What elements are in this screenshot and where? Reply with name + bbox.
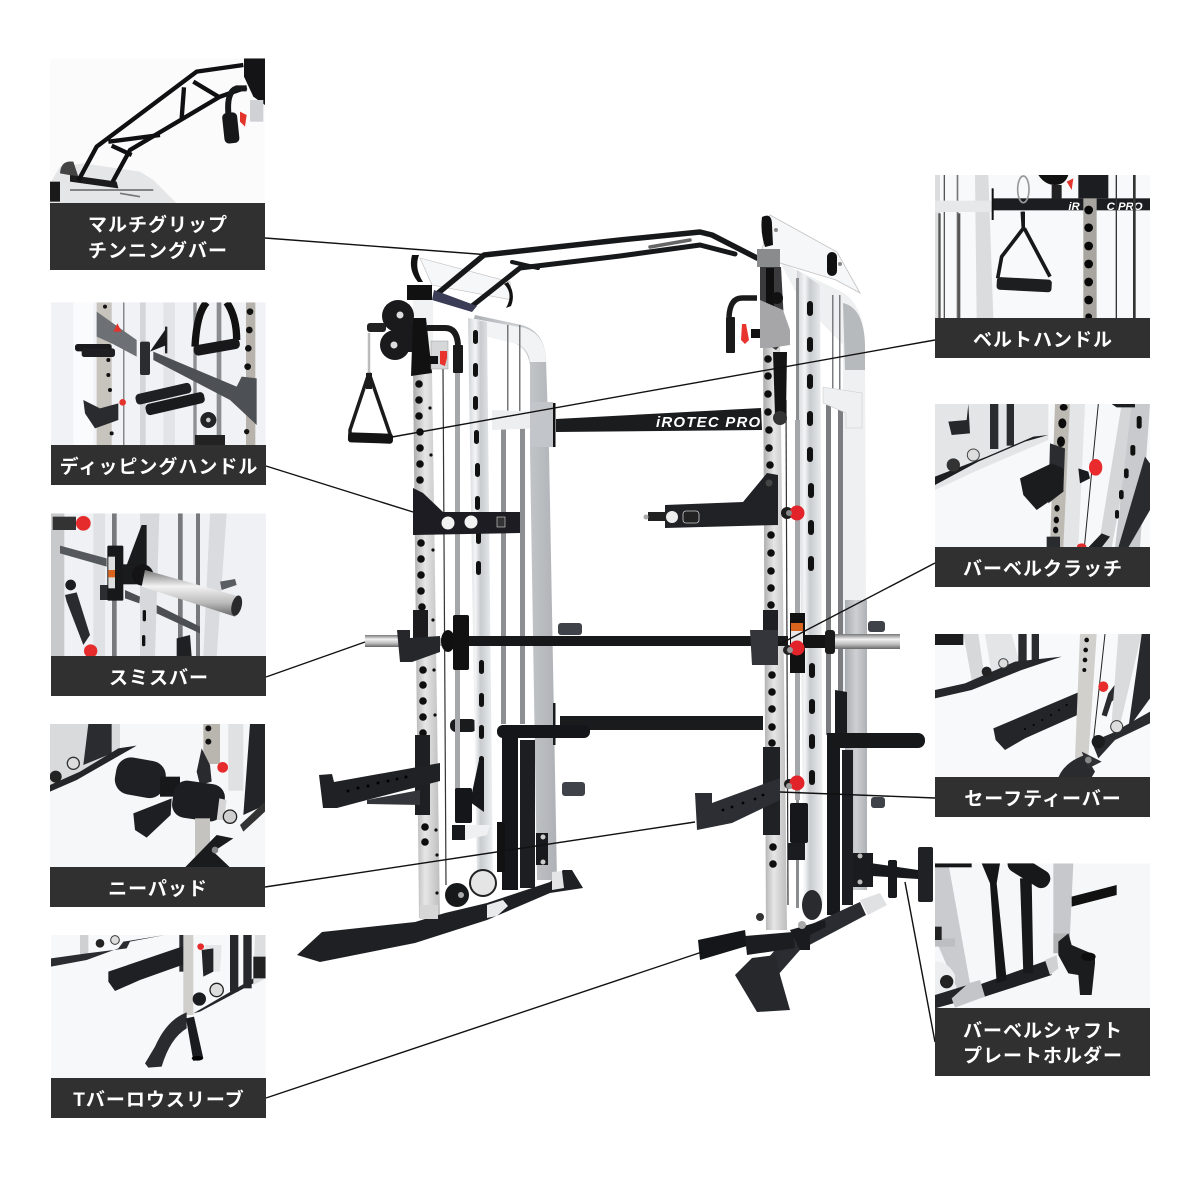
label: smith bar <box>51 656 266 696</box>
label: multi-grip chinning bar <box>50 203 265 270</box>
rear pegs <box>558 621 885 808</box>
leader line: knee pad <box>265 822 695 887</box>
label: dipping handle <box>51 445 266 485</box>
leader line: barbell catch <box>778 563 935 645</box>
smith bar guide rods <box>455 372 800 802</box>
panel: multi-grip chinning bar <box>50 58 265 270</box>
label: knee pad <box>50 867 265 907</box>
left barbell catch <box>397 610 440 662</box>
panel: barbell shaft plate holder <box>935 851 1150 1076</box>
photo: barbell shaft plate holder <box>935 851 1150 1008</box>
right safety bar <box>695 747 804 835</box>
left hook grip <box>426 328 463 373</box>
label: barbell catch: バーベルクラッチ <box>963 558 1123 580</box>
panel: safety bar <box>935 634 1150 817</box>
t-bar row sleeve <box>698 913 826 960</box>
photo: belt handle: iR <box>1068 201 1080 213</box>
right guide rods <box>826 295 843 735</box>
multi-grip chinning bar <box>437 232 757 306</box>
leader line: multi-grip bar <box>265 238 490 255</box>
smith bar <box>365 630 900 654</box>
dipping handle right <box>644 473 804 528</box>
right white bracket <box>823 387 862 428</box>
panel: dipping handle <box>51 302 266 485</box>
left front upright with holes <box>413 370 440 918</box>
label: multi-grip chinning bar: マルチグリップ <box>88 213 228 236</box>
leader line: T-bar row sleeve <box>266 952 702 1098</box>
rear left arched upright <box>470 315 557 880</box>
label: barbell shaft plate holder: プレートホルダー <box>963 1044 1123 1067</box>
photo: smith bar <box>51 513 266 658</box>
lower bar with plate pegs <box>450 703 763 745</box>
label: belt handle <box>935 318 1150 358</box>
label: smith bar: スミスバー <box>109 667 209 689</box>
photo: knee pad <box>50 724 265 867</box>
left safety bar <box>319 735 440 815</box>
cables <box>443 368 788 905</box>
iROTEC PRO branded bar <box>553 403 762 447</box>
panel: smith bar <box>51 513 266 696</box>
label: safety bar: セーフティーバー <box>964 788 1122 810</box>
right front upright with holes <box>763 340 787 930</box>
left base with feet <box>297 870 583 962</box>
label: barbell catch <box>935 547 1150 587</box>
label: T-bar row sleeve <box>51 1078 266 1118</box>
leader line: dipping handle <box>266 466 413 512</box>
right smith carriage with safety label <box>783 613 805 673</box>
right barbell catch <box>750 610 778 665</box>
rear right arched upright <box>780 262 867 890</box>
photo: T-bar row sleeve <box>51 935 266 1078</box>
right base <box>735 893 887 1012</box>
photo: dipping handle <box>51 302 266 445</box>
label: knee pad: ニーパッド <box>108 878 208 900</box>
label: belt handle: ベルトハンドル <box>973 330 1113 351</box>
photo: safety bar <box>935 634 1150 777</box>
left center slotted upright <box>468 318 493 883</box>
panel: belt handle <box>935 175 1150 358</box>
left side hanging handle <box>348 333 393 444</box>
leader line: plate holder <box>905 882 935 1042</box>
top-right white plate with pulleys <box>761 215 860 293</box>
iROTEC PRO branded bar: iROTEC PRO <box>656 414 761 431</box>
panel: knee pad <box>50 724 265 907</box>
lower left carriage and bearings <box>452 760 490 840</box>
label: multi-grip chinning bar: チンニングバー <box>88 239 228 262</box>
left white rear bracket <box>492 402 553 447</box>
panel: barbell catch <box>935 404 1150 587</box>
leader line: belt handle <box>392 340 935 437</box>
right center slotted upright <box>796 270 823 908</box>
panel: T-bar row sleeve <box>51 935 266 1118</box>
photo: barbell catch <box>935 404 1150 550</box>
left smith carriage <box>453 615 469 670</box>
left plate holder tubes <box>497 725 590 890</box>
label: T-bar row sleeve: Tバーロウスリーブ <box>73 1088 245 1111</box>
dipping handle left <box>413 488 520 535</box>
leader line: safety bar <box>780 792 935 798</box>
top-left frame parts <box>407 255 513 370</box>
label: barbell shaft plate holder <box>935 1008 1150 1076</box>
photo: belt handle: C PRO <box>1107 201 1143 213</box>
label: safety bar <box>935 777 1150 817</box>
lower right carriage and pulley <box>788 690 847 920</box>
right plate holder tubes <box>827 733 925 915</box>
leader line: smith bar <box>266 642 365 677</box>
left guide rods <box>501 325 525 724</box>
barbell shaft and plate holder <box>853 847 933 902</box>
photo: belt handle <box>935 175 1150 320</box>
right hanging strap <box>773 352 787 425</box>
right pulley and hook head <box>726 249 790 353</box>
left cable pulley head <box>367 300 432 376</box>
label: dipping handle: ディッピングハンドル <box>60 455 258 478</box>
photo: chinning bar <box>50 58 265 203</box>
upper chin-bar back frame <box>420 258 512 300</box>
label: barbell shaft plate holder: バーベルシャフト <box>963 1020 1123 1042</box>
main machine: power rack with smith bar <box>297 215 933 1012</box>
